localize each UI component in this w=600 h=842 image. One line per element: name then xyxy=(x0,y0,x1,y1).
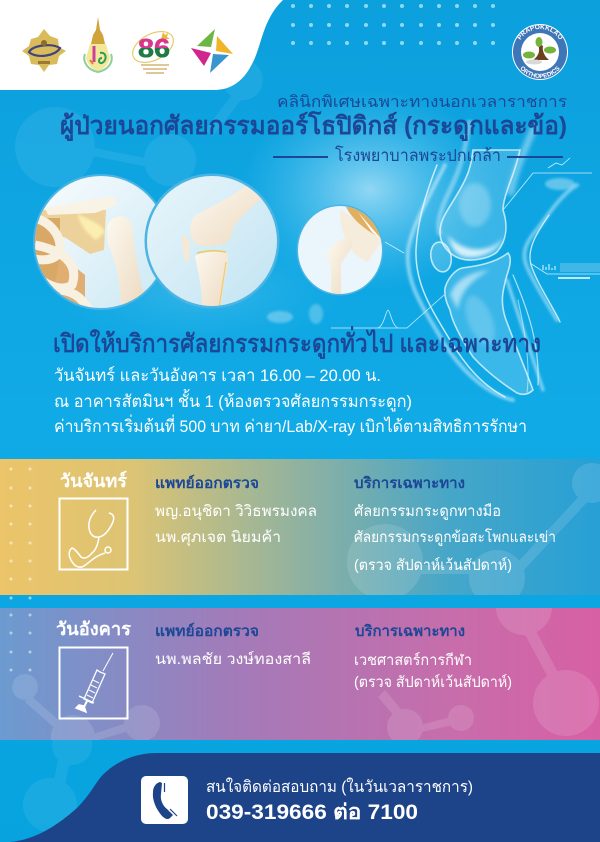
services list xyxy=(354,503,556,574)
day label: วันจันทร์ xyxy=(60,470,127,491)
title block xyxy=(60,94,567,165)
icon: syringe xyxy=(60,648,128,718)
services heading: บริการเฉพาะทาง xyxy=(355,622,465,640)
services list: ศัลยกรรมกระดูกทางมือ xyxy=(354,503,501,520)
illustration: x-ray knee xyxy=(267,120,600,400)
dots xyxy=(10,468,32,600)
doctor names: นพ.ศุภเจต นิยมค้า xyxy=(155,529,281,547)
logo: 86 anniversary xyxy=(127,25,179,74)
doctor name: นพ.พลชัย วงษ์ทองสาลี xyxy=(155,651,311,668)
services list: (ตรวจ สัปดาห์เว้นสัปดาห์) xyxy=(354,674,512,691)
clinic details xyxy=(54,366,527,436)
fees: ค่าบริการเริ่มต้นที่ 500 บาท ค่ายา/Lab/X-ray เบิกได้ตามสิทธิการรักษา xyxy=(54,414,527,436)
hours: วันจันทร์ และวันอังคาร เวลา 16.00 – 20.00 น. xyxy=(54,366,381,385)
logo: star xyxy=(191,29,233,73)
hospital name with rules: โรงพยาบาลพระปกเกล้า xyxy=(335,145,501,165)
icon: phone xyxy=(141,776,188,824)
location: ณ อาคารสัตมินฯ ชั้น 1 (ห้องตรวจศัลยกรรมกระดูก) xyxy=(54,389,412,412)
main title: ผู้ป่วยนอกศัลยกรรมออร์โธปิดิกส์ (กระดูกและข้อ) xyxy=(60,110,567,142)
photo: shoulder bones xyxy=(33,174,157,310)
doctor names: พญ.อนุชิดา วิวิธพรมงคล xyxy=(155,503,317,521)
services list: ศัลยกรรมกระดูกข้อสะโพกและเข่า xyxy=(354,528,556,546)
services list: (ตรวจ สัปดาห์เว้นสัปดาห์) xyxy=(354,557,512,574)
doctors heading: แพทย์ออกตรวจ xyxy=(155,622,259,640)
dots xyxy=(10,614,32,672)
logo: crown emblem xyxy=(84,17,112,72)
logo: gold diamond xyxy=(22,29,66,72)
doctors heading: แพทย์ออกตรวจ xyxy=(155,474,259,492)
services list: เวชศาสตร์การกีฬา xyxy=(354,652,472,669)
footer bar xyxy=(10,753,600,842)
services heading: บริการเฉพาะทาง xyxy=(354,474,465,492)
logo: Prapokklao Orthopedics badge: ORTHOPEDICS xyxy=(520,66,560,78)
dot pattern: top xyxy=(291,4,495,45)
logo: Prapokklao Orthopedics badge: PRAPOKKLAO xyxy=(517,25,562,40)
logo: Prapokklao Orthopedics badge xyxy=(512,24,568,80)
phone number: 039-319666 ต่อ 7100 xyxy=(206,801,418,824)
icon: stethoscope xyxy=(60,498,128,570)
logo: 86 anniversary: 86 xyxy=(138,33,170,63)
white logo header shape xyxy=(0,0,283,90)
photo: knee bones xyxy=(144,174,280,308)
day label: วันอังคาร xyxy=(56,619,131,639)
photo: hip bones xyxy=(295,204,385,298)
clinic subtitle: คลินิกพิเศษเฉพาะทางนอกเวลาราชการ xyxy=(277,94,567,111)
services heading: เปิดให้บริการศัลยกรรมกระดูกทั่วไป และเฉพาะทาง xyxy=(53,326,541,359)
doctor names xyxy=(155,503,317,547)
logo row xyxy=(22,17,233,74)
contact label: สนใจติดต่อสอบถาม (ในวันเวลาราชการ) xyxy=(206,777,473,796)
panel: Tuesday xyxy=(0,608,600,740)
services list xyxy=(354,652,512,691)
panel: Monday xyxy=(0,459,600,606)
